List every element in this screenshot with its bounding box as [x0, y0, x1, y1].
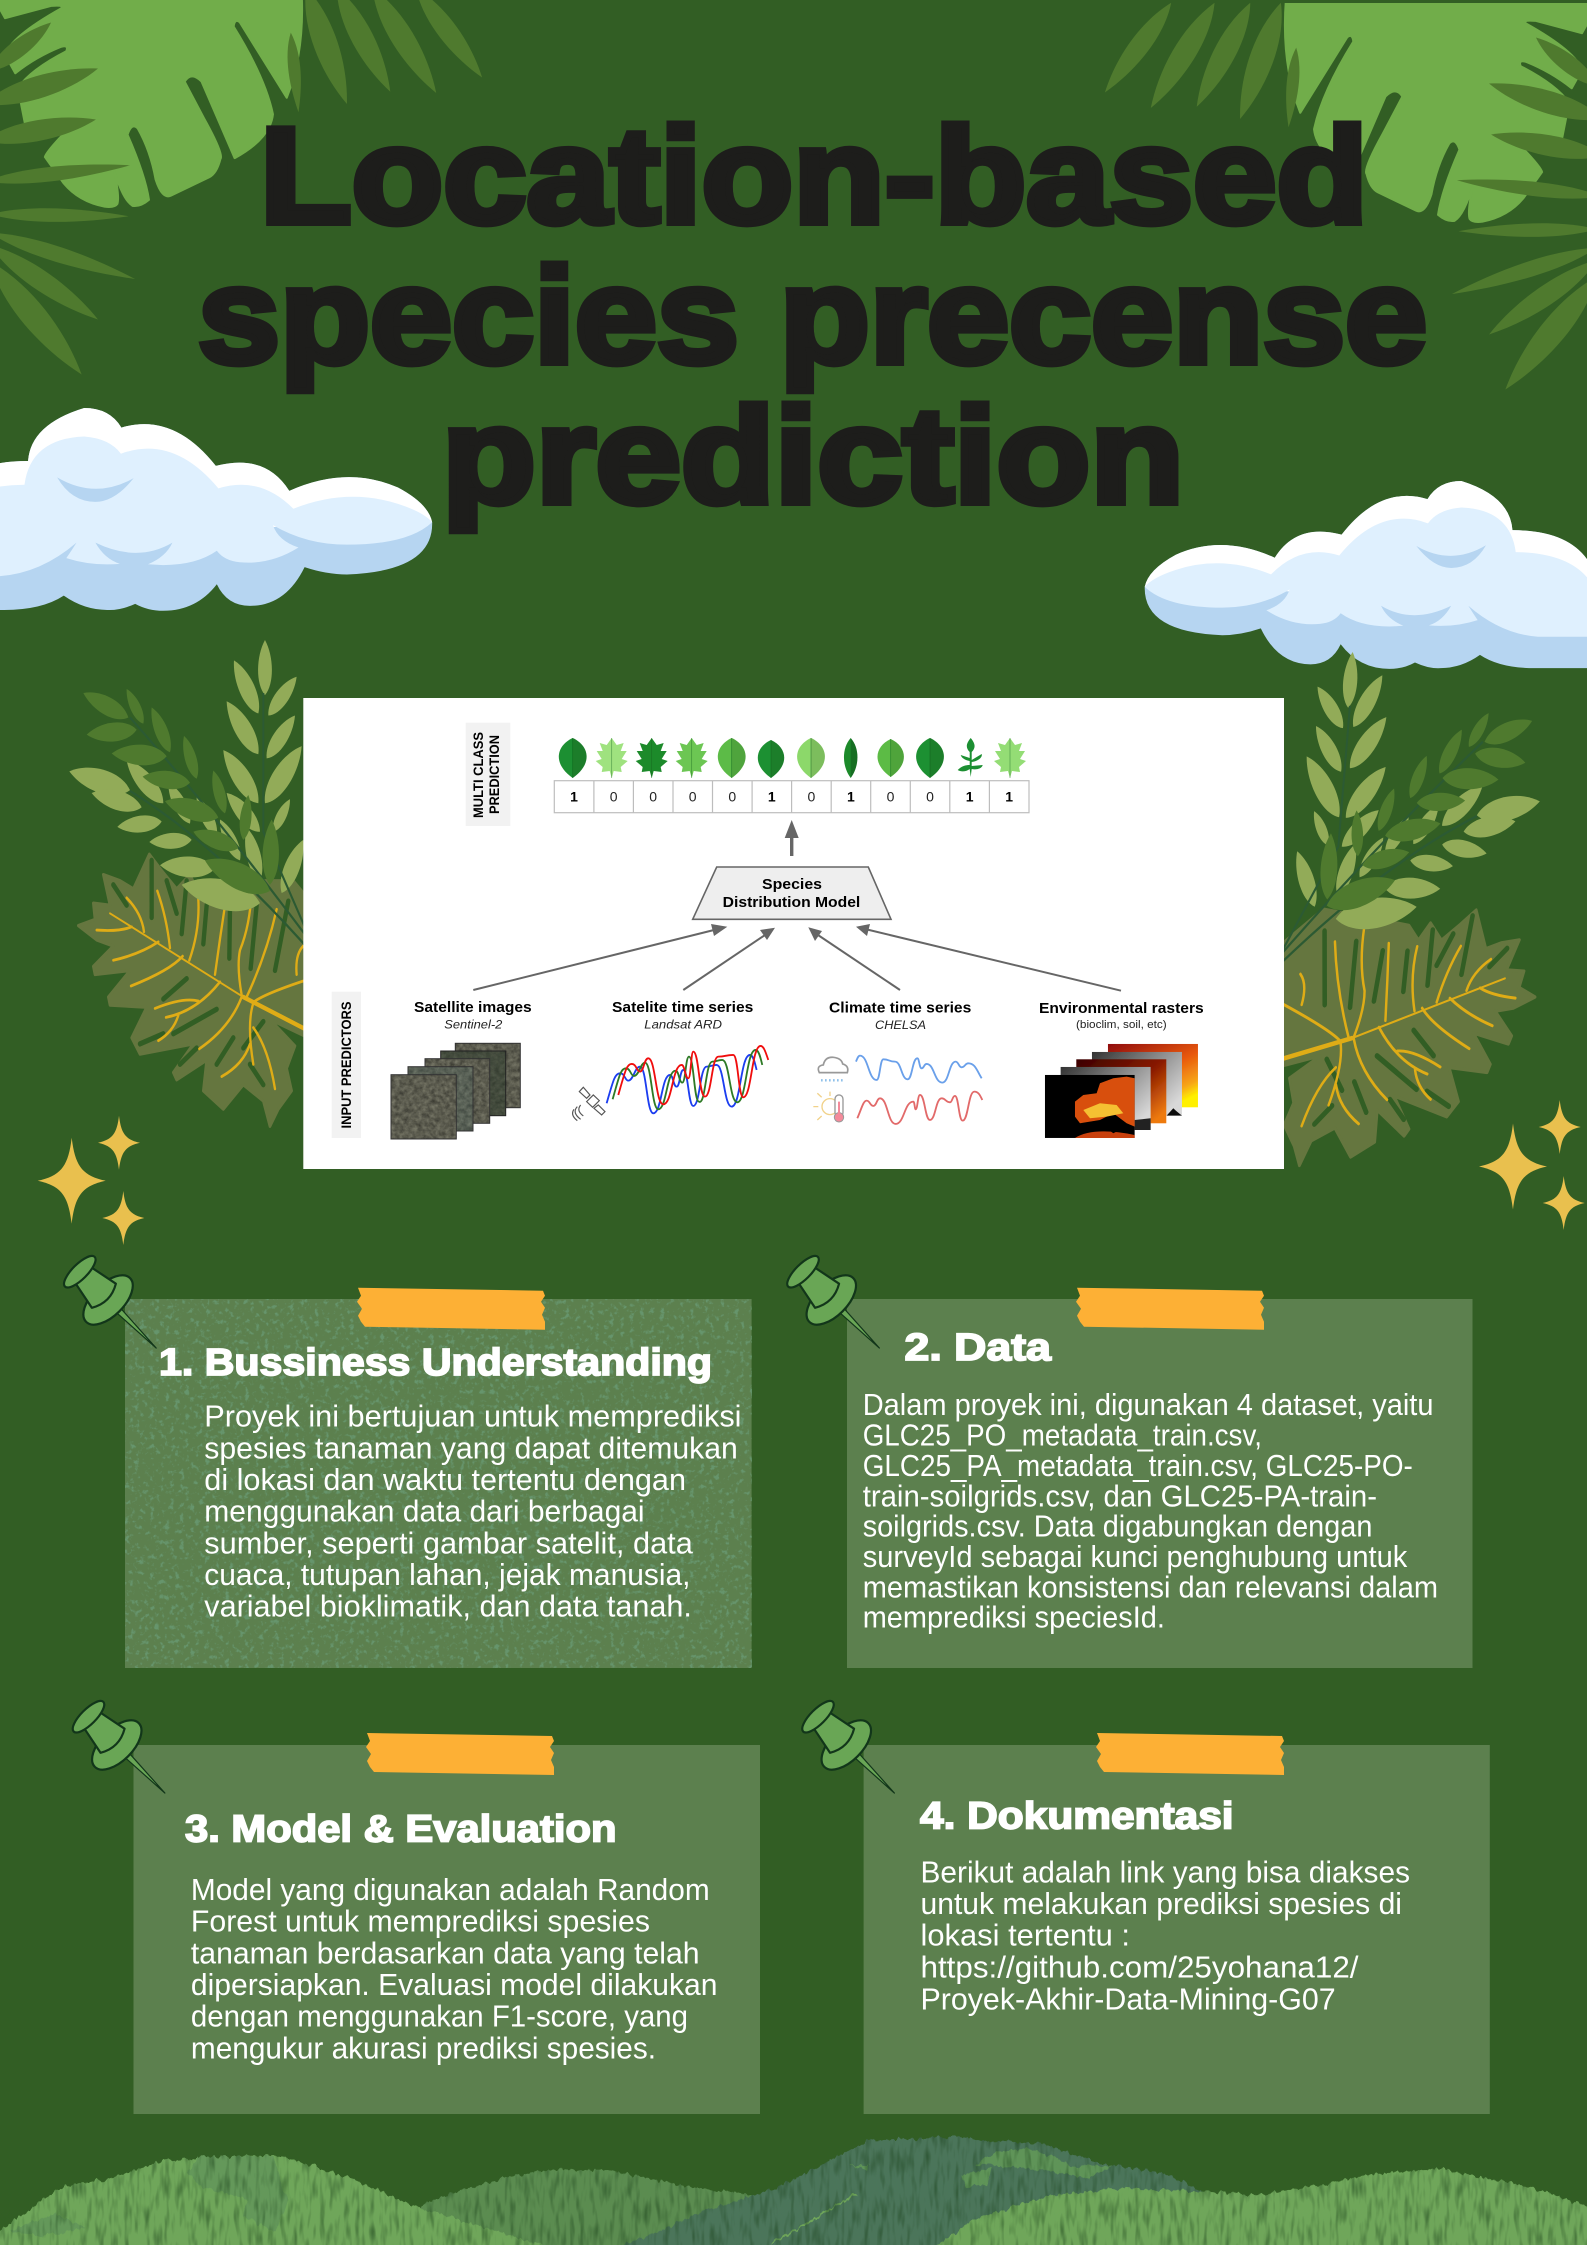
prediction vector cells: 1: [768, 788, 776, 804]
box background: [847, 1299, 1472, 1668]
input: environmental rasters: (bioclim, soil, etc): [1076, 1019, 1167, 1031]
input: climate time series: CHELSA: [875, 1018, 926, 1032]
body text: di lokasi dan waktu tertentu dengan: [204, 1463, 686, 1497]
body text: [204, 1400, 742, 1624]
body text: Proyek-Akhir-Data-Mining-G07: [920, 1982, 1336, 2016]
body text: dengan menggunakan F1-score, yang: [191, 2000, 688, 2034]
input: climate time series: Climate time series: [829, 999, 971, 1016]
mountain: dark teal: [587, 2137, 1204, 2245]
body text: Proyek ini bertujuan untuk memprediksi: [204, 1400, 742, 1434]
title: [198, 100, 1427, 532]
leaf icons row: [559, 738, 1026, 778]
mountain: front right: [911, 2168, 1587, 2245]
body text: dipersiapkan. Evaluasi model dilakukan: [191, 1968, 717, 2002]
body text: GLC25_PO_metadata_train.csv,: [863, 1419, 1262, 1453]
icon: pin 3: [61, 1689, 187, 1815]
prediction vector cells: 0: [689, 788, 697, 804]
top strip above right leaves: [1000, 0, 1587, 3]
tape: [1096, 1733, 1284, 1775]
prediction vector cells: [554, 781, 1029, 813]
body text: tanaman berdasarkan data yang telah: [191, 1936, 700, 1970]
heading: 2. Data: [904, 1327, 1052, 1369]
input: satellite time series: Landsat ARD: [644, 1017, 722, 1031]
streak: [771, 2195, 855, 2244]
body text: variabel bioklimatik, dan data tanah.: [204, 1590, 692, 1624]
multi class prediction label: [466, 723, 510, 826]
model trapezoid: Species: [762, 876, 822, 893]
mountain: back: [405, 2168, 789, 2245]
prediction vector cells: 0: [728, 788, 736, 804]
icon: pin 4: [791, 1689, 916, 1815]
body text: untuk melakukan prediksi spesies di: [920, 1887, 1402, 1921]
body text: Forest untuk memprediksi spesies: [191, 1905, 650, 1939]
heading: 1. Bussiness Understanding: [159, 1342, 712, 1384]
prediction vector cells: 1: [847, 788, 855, 804]
arrow: model to prediction: [785, 820, 799, 856]
body text: [920, 1855, 1410, 2016]
title: species precense: [198, 240, 1427, 392]
box background: [134, 1745, 760, 2114]
prediction vector cells: 1: [570, 788, 578, 804]
cloud: left: [0, 408, 432, 611]
icon: pin 1: [53, 1244, 178, 1370]
body text: surveyId sebagai kunci penghubung untuk: [863, 1540, 1408, 1574]
input: satellite images: [391, 999, 532, 1139]
multi class prediction label: PREDICTION: [487, 735, 502, 814]
input: satellite time series: [573, 999, 768, 1121]
input: environmental rasters: Environmental rasters: [1039, 1000, 1204, 1017]
heading: 3. Model & Evaluation: [185, 1809, 616, 1851]
mountain: front left: [0, 2156, 587, 2245]
model trapezoid: [693, 867, 891, 919]
panel: 4 dokumentasi: [864, 1733, 1490, 2114]
highlights on dark mountain: [850, 2148, 1113, 2187]
prediction vector cells: 1: [1005, 788, 1013, 804]
body text: [863, 1388, 1438, 1635]
panel: 2 data: [847, 1288, 1472, 1668]
body text: spesies tanaman yang dapat ditemukan: [204, 1431, 738, 1465]
box texture: [125, 1299, 752, 1668]
body text: Model yang digunakan adalah Random: [191, 1873, 710, 1907]
input: satellite images: Satellite images: [414, 999, 532, 1016]
heading: 4. Dokumentasi: [920, 1795, 1234, 1837]
olive leaf: right: [1238, 875, 1549, 1203]
panel: 3 model and evaluation: [134, 1733, 760, 2114]
input predictors label: [332, 992, 361, 1138]
body text: Dalam proyek ini, digunakan 4 dataset, yaitu: [863, 1388, 1434, 1422]
tape: [1076, 1288, 1264, 1330]
olive leaf: left: [78, 854, 330, 1126]
fern fronds: right: [1274, 648, 1553, 991]
mountains: [0, 2137, 1587, 2245]
body text: mengukur akurasi prediksi spesies.: [191, 2032, 656, 2066]
input: environmental rasters: [1039, 1000, 1204, 1138]
input: satellite time series: Satelite time series: [612, 999, 753, 1016]
body text: https://github.com/25yohana12/: [920, 1950, 1359, 1984]
tropical leaves: top left: [0, 0, 491, 381]
panel: species distribution model diagram: [303, 698, 1284, 1169]
body text: [191, 1873, 717, 2066]
prediction vector cells: 0: [887, 788, 895, 804]
body text: Berikut adalah link yang bisa diakses: [920, 1855, 1410, 1889]
title: prediction: [442, 380, 1184, 532]
tropical leaves: top right: [1096, 0, 1587, 396]
tape: [357, 1288, 545, 1330]
body text: soilgrids.csv. Data digabungkan dengan: [863, 1510, 1372, 1544]
prediction vector cells: 0: [649, 788, 657, 804]
body text: lokasi tertentu :: [920, 1919, 1130, 1953]
darker patches left mountain: [10, 2157, 288, 2237]
body text: memprediksi speciesId.: [863, 1601, 1165, 1635]
sparkles: left: [38, 1116, 144, 1245]
input: satellite images: Sentinel-2: [444, 1017, 503, 1031]
body text: GLC25_PA_metadata_train.csv, GLC25-PO-: [863, 1449, 1413, 1483]
title: Location-based: [260, 100, 1368, 252]
cloud: right: [1145, 481, 1587, 669]
body text: menggunakan data dari berbagai: [204, 1495, 645, 1529]
body text: sumber, seperti gambar satelit, data: [204, 1526, 693, 1560]
body text: cuaca, tutupan lahan, jejak manusia,: [204, 1558, 691, 1592]
box background: [125, 1299, 752, 1668]
prediction vector cells: 1: [966, 788, 974, 804]
input: climate time series: [813, 999, 982, 1124]
prediction vector cells: 0: [808, 788, 816, 804]
icon: pin 2: [776, 1244, 901, 1370]
tape: [366, 1733, 554, 1775]
fern fronds: left: [67, 640, 317, 958]
prediction vector cells: 0: [610, 788, 618, 804]
body text: train-soilgrids.csv, dan GLC25-PA-train-: [863, 1480, 1377, 1514]
sparkles: right: [1479, 1100, 1585, 1230]
body text: memastikan konsistensi dan relevansi dalam: [863, 1571, 1438, 1605]
box background: [864, 1745, 1490, 2114]
panel: 1 business understanding: [125, 1288, 752, 1668]
multi class prediction label: MULTI CLASS: [471, 732, 486, 818]
input predictors label: INPUT PREDICTORS: [339, 1002, 354, 1128]
prediction vector cells: 0: [926, 788, 934, 804]
arrows: inputs to model: [473, 924, 1121, 991]
model trapezoid: Distribution Model: [723, 894, 860, 911]
